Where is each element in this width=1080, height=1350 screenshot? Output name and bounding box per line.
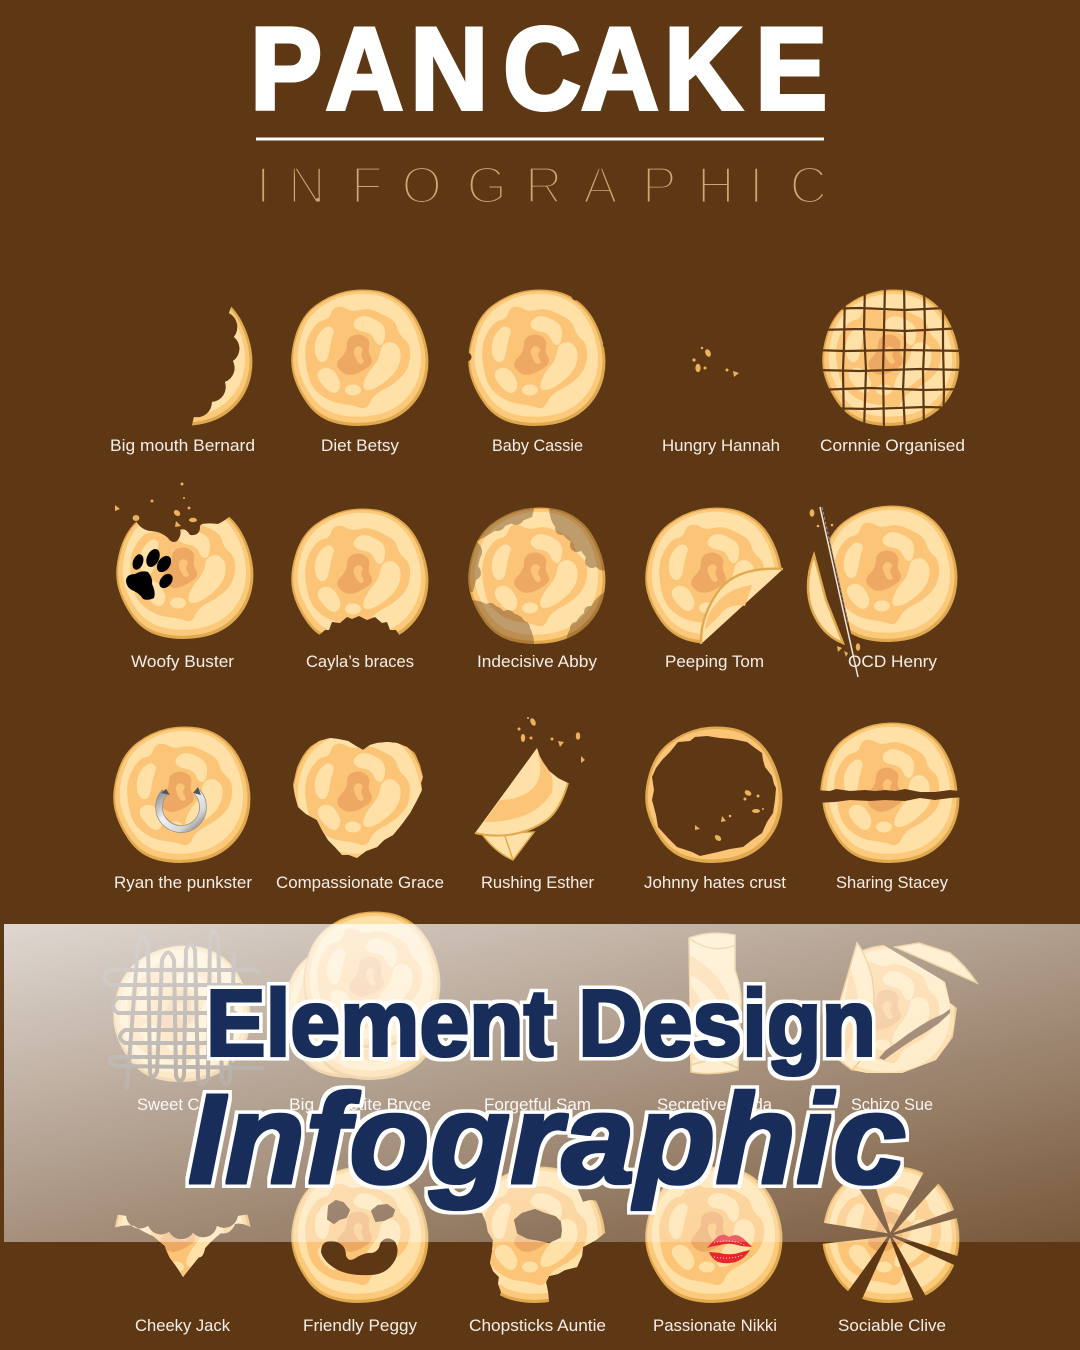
label: Diet Betsy: [321, 436, 399, 455]
icon: pancake with syrup lattice: [104, 931, 262, 1088]
icon: pancake with piercing ring: [113, 726, 250, 863]
pancake: Ryan the punkster: [113, 726, 252, 892]
icon: pancake with peeled corner: [645, 507, 800, 665]
label: Big Appetite Bryce: [289, 1095, 431, 1114]
icon: paw print: [126, 547, 175, 600]
pancake: OCD Henry: [800, 490, 957, 677]
label: Hungry Hannah: [662, 436, 780, 455]
pancake: Johnny hates crust: [644, 726, 786, 892]
pancake: Big mouth Bernard: [111, 306, 254, 454]
icon: scalloped V remnant: [115, 1214, 250, 1277]
label: OCD Henry: [848, 652, 937, 671]
icon: stacked pancakes: [283, 911, 440, 1080]
label: Baby Cassie: [492, 436, 583, 455]
icon: crust ring with crumbs: [645, 726, 782, 863]
pancake: Indecisive Abby: [468, 508, 606, 670]
pancake: Rushing Esther: [475, 717, 594, 892]
title block: [250, 3, 827, 215]
subtitle INFOGRAPHIC: INFOGRAPHIC: [256, 157, 827, 215]
pancake: Schizo Sue: [838, 942, 979, 1110]
pancake: Peeping Tom: [645, 507, 800, 671]
headline: Element Design: Element Design: [206, 970, 876, 1076]
headline overlay: [188, 970, 906, 1211]
label: Ryan the punkster: [114, 873, 252, 892]
label: Compassionate Grace: [276, 873, 444, 892]
icon: crumbs: [692, 347, 739, 377]
icon: fractured pancake with loose pieces: [838, 942, 979, 1073]
icon: rolled pancake with crumbs: [475, 717, 585, 860]
pancake: Hungry Hannah: [662, 347, 780, 455]
pancake: Sharing Stacey: [815, 722, 968, 892]
icon: pancake sliced with a knife: [800, 490, 957, 677]
pancake: Woofy Buster: [115, 482, 253, 671]
label: Indecisive Abby: [477, 652, 597, 671]
icon: whole pancake: [291, 289, 428, 426]
pancake: Cornnie Organised: [815, 285, 965, 455]
pancake: Passionate Nikki: [645, 1166, 782, 1335]
icon: pancake with lipstick kiss: [645, 1166, 782, 1303]
icon: jagged pancake with hole: [468, 1166, 605, 1303]
icon: pancake split horizontally: [815, 722, 968, 863]
headline: Infographic: Infographic: [188, 1068, 906, 1211]
icon: pancake with zig-zag bite: [291, 508, 428, 655]
icon: folded pancake roll: [689, 933, 741, 1074]
pancake: Cayla's braces: [291, 508, 428, 671]
label: Sharing Stacey: [836, 873, 948, 892]
pancake: Chopsticks Auntie: [468, 1166, 606, 1335]
pancake: Friendly Peggy: [291, 1166, 428, 1335]
label: Cornnie Organised: [820, 436, 965, 455]
label: Friendly Peggy: [303, 1316, 418, 1335]
icon: pancake with dog bite and paw print: [115, 482, 253, 639]
pancake: Sweet Carol: [104, 931, 262, 1114]
pancake: Secretive Linda: [657, 933, 773, 1114]
label: Rushing Esther: [481, 873, 594, 892]
label: Sociable Clive: [838, 1316, 946, 1335]
icon: pancake with smiley face: [291, 1166, 428, 1303]
translucent banner: [4, 924, 1080, 1242]
pancake: Big Appetite Bryce: [283, 911, 440, 1114]
icon: heart shaped pancake: [293, 738, 423, 858]
label: Forgetful Sam: [484, 1095, 591, 1114]
main title PANCAKE: PANCAKE: [250, 3, 827, 134]
label: Johnny hates crust: [644, 873, 786, 892]
label: Cayla’s braces: [306, 652, 414, 671]
pancake: Baby Cassie: [462, 289, 607, 455]
icon: bitten crescent: [192, 306, 252, 426]
icon: pancake with tiny bites: [462, 289, 607, 426]
label: Secretive Linda: [657, 1095, 773, 1114]
icon: pancake with nibbled shaded rim: [468, 508, 606, 644]
label: Schizo Sue: [851, 1095, 933, 1114]
pancake: Cheeky Jack: [115, 1214, 250, 1334]
label: Cheeky Jack: [135, 1316, 230, 1335]
pancake: Compassionate Grace: [276, 726, 444, 892]
label: Big mouth Bernard: [110, 436, 255, 455]
label: Woofy Buster: [131, 652, 234, 671]
label: Peeping Tom: [665, 652, 764, 671]
icon: pancake cut in a grid: [822, 290, 960, 426]
icon: pancake cut into slices: [812, 1166, 970, 1309]
pancake: Diet Betsy: [291, 289, 428, 455]
label: Passionate Nikki: [653, 1316, 777, 1335]
pancake: Sociable Clive: [812, 1166, 970, 1335]
title rule: [256, 138, 824, 140]
label: Chopsticks Auntie: [469, 1316, 606, 1335]
label: Sweet Carol: [137, 1095, 227, 1114]
